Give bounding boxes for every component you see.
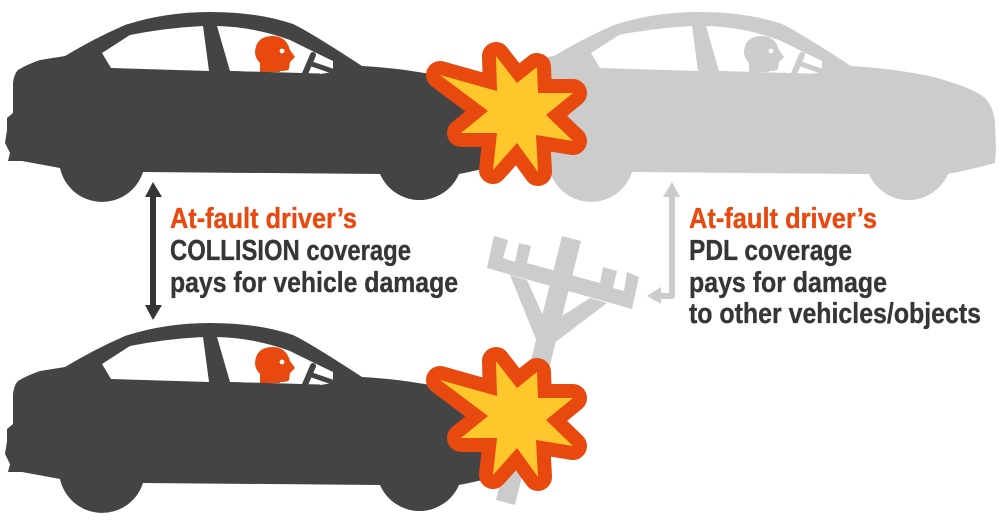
elbow arrow: to grey car and pole (647, 182, 680, 304)
text block: collision coverage: At-fault driver’s (170, 203, 357, 235)
text block: collision coverage: pays for vehicle damage (170, 267, 458, 299)
at-fault car, bottom (5, 323, 507, 513)
at-fault car, top (5, 12, 507, 202)
explosion, bottom collision (440, 361, 573, 477)
explosion, top collision (440, 56, 573, 172)
text block: PDL coverage: pays for damage (689, 267, 887, 299)
other car, grey (494, 12, 996, 202)
text block: collision coverage (170, 203, 458, 299)
driver head, orange (255, 36, 295, 72)
text block: PDL coverage (689, 203, 981, 330)
text block: collision coverage: COLLISION coverage (170, 235, 411, 267)
driver head, orange (255, 347, 295, 383)
text block: PDL coverage: At-fault driver’s (689, 203, 877, 235)
double-headed arrow: between at-fault cars (145, 182, 162, 320)
text block: PDL coverage: PDL coverage (689, 235, 852, 267)
utility pole (487, 236, 639, 505)
